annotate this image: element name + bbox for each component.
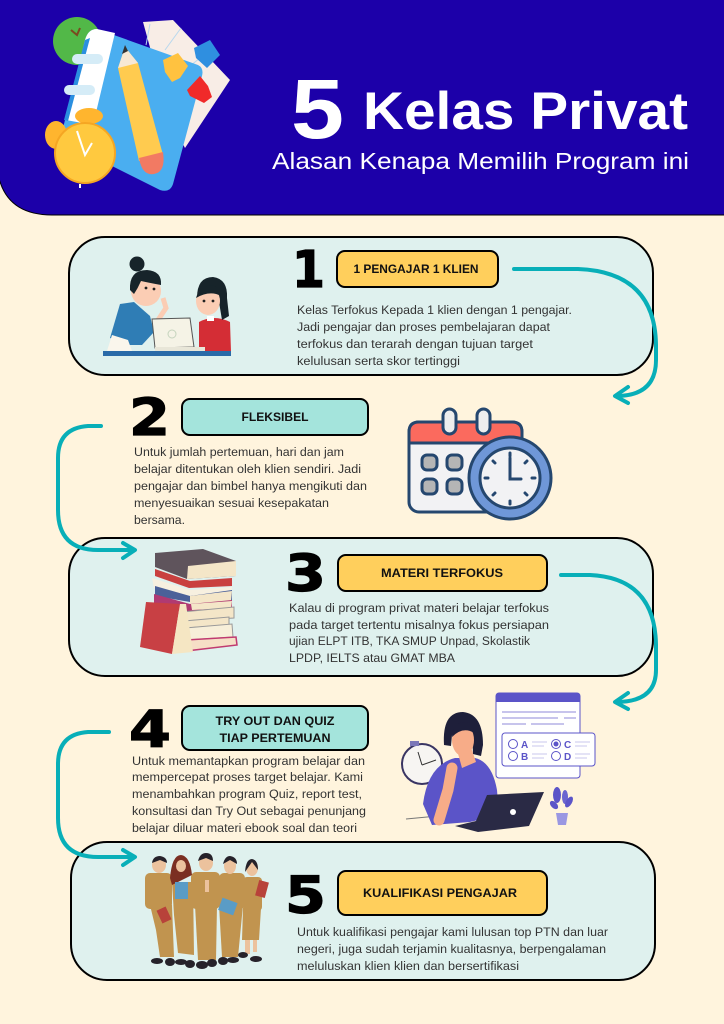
text block 3: pada target tertentu misalnya fokus persiapan — [289, 618, 549, 632]
header banner — [0, 0, 724, 215]
arrow: 1 to 2 — [514, 269, 656, 403]
text block 2: pengajar dan bimbel hanya mengikuti dan — [134, 479, 367, 493]
quiz answer card: D — [564, 752, 571, 763]
quiz answer card: B — [521, 752, 528, 763]
heading pill 5: KUALIFIKASI PENGAJAR — [363, 888, 518, 900]
text block 4: konsultasi dan Try Out sebagai penunjang — [132, 804, 366, 818]
text block 4: mempercepat proses target belajar. Kami — [132, 770, 363, 784]
title — [272, 62, 689, 174]
stopwatch — [402, 741, 442, 784]
arrow: 3 to 4 — [561, 575, 656, 709]
heading pill 4 — [182, 706, 368, 750]
text block 5: Untuk kualifikasi pengajar kami lulusan top PTN dan luar — [297, 925, 608, 939]
icon: calendar and clock — [409, 409, 551, 519]
title: Kelas Privat — [363, 82, 688, 141]
text block 1 — [297, 303, 572, 368]
text block 3: ujian ELPT ITB, TKA SMUP Unpad, Skolastik — [289, 634, 531, 648]
heading pill 2 — [182, 399, 368, 435]
text block 5: meluluskan klien klien dan bersertifikasi — [297, 959, 519, 973]
panel: reason 5 — [71, 842, 655, 980]
heading pill 3 — [338, 555, 547, 591]
panel: reason 3 — [69, 538, 653, 676]
arrow: 2 to 3 — [58, 426, 135, 558]
text block 4: Untuk memantapkan program belajar dan — [132, 754, 365, 768]
heading pill 3: MATERI TERFOKUS — [381, 568, 503, 580]
heading pill 1 — [337, 251, 498, 287]
text block 5 — [297, 925, 608, 973]
number 2: 2 — [129, 389, 170, 448]
text block 1: terfokus dan terarah dengan tujuan target — [297, 337, 534, 351]
title: 5 — [291, 62, 344, 156]
quiz answer card: C — [564, 740, 571, 751]
heading pill 2: FLEKSIBEL — [242, 412, 308, 424]
quiz answer card: A — [521, 740, 528, 751]
text block 4: belajar diluar materi ebook soal dan teori — [132, 821, 357, 835]
text block 2: belajar ditentukan oleh klien sendiri. Jadi — [134, 462, 361, 476]
quiz answer card — [502, 733, 595, 766]
heading pill 5 — [338, 871, 547, 915]
text block 1: Kelas Terfokus Kepada 1 klien dengan 1 pengajar. — [297, 303, 572, 317]
text block 3: LPDP, IELTS atau GMAT MBA — [289, 651, 456, 665]
icon: stack of books — [140, 549, 237, 654]
arrow: 4 to 5 — [58, 732, 135, 865]
number 5: 5 — [285, 867, 326, 926]
illustration: five civil-servant teachers — [145, 853, 269, 969]
text block 3: Kalau di program privat materi belajar terfokus — [289, 601, 549, 615]
illustration: notebook with pencil, clock, apple and puzzle — [45, 17, 230, 191]
text block 4 — [132, 754, 366, 835]
text block 1: kelulusan serta skor tertinggi — [297, 354, 460, 368]
text block 3 — [289, 601, 549, 665]
panel: reason 1 — [69, 237, 653, 375]
number 4: 4 — [129, 701, 171, 760]
title: Alasan Kenapa Memilih Program ini — [272, 148, 689, 174]
section: reason 4 — [129, 693, 595, 835]
text block 2: bersama. — [134, 513, 185, 527]
plant — [548, 787, 575, 825]
text block 5: negeri, juga sudah terjamin kualitasnya, berpengalaman — [297, 942, 606, 956]
icon: teacher and client at laptop — [103, 256, 231, 356]
text block 2: menyesuaikan sesuai kesepakatan — [134, 496, 329, 510]
heading pill 1: 1 PENGAJAR 1 KLIEN — [354, 264, 478, 276]
number 1: 1 — [292, 241, 325, 300]
heading pill 4: TIAP PERTEMUAN — [220, 733, 330, 745]
illustration: student taking online quiz — [402, 693, 595, 832]
text block 2: Untuk jumlah pertemuan, hari dan jam — [134, 445, 344, 459]
number 3: 3 — [285, 545, 326, 604]
text block 1: Jadi pengajar dan proses pembelajaran dapat — [297, 320, 551, 334]
heading pill 4: TRY OUT DAN QUIZ — [216, 716, 334, 728]
text block 2 — [134, 445, 367, 527]
text block 4: menambahkan program Quiz, report test, — [132, 787, 362, 801]
section: reason 2 — [129, 389, 551, 527]
